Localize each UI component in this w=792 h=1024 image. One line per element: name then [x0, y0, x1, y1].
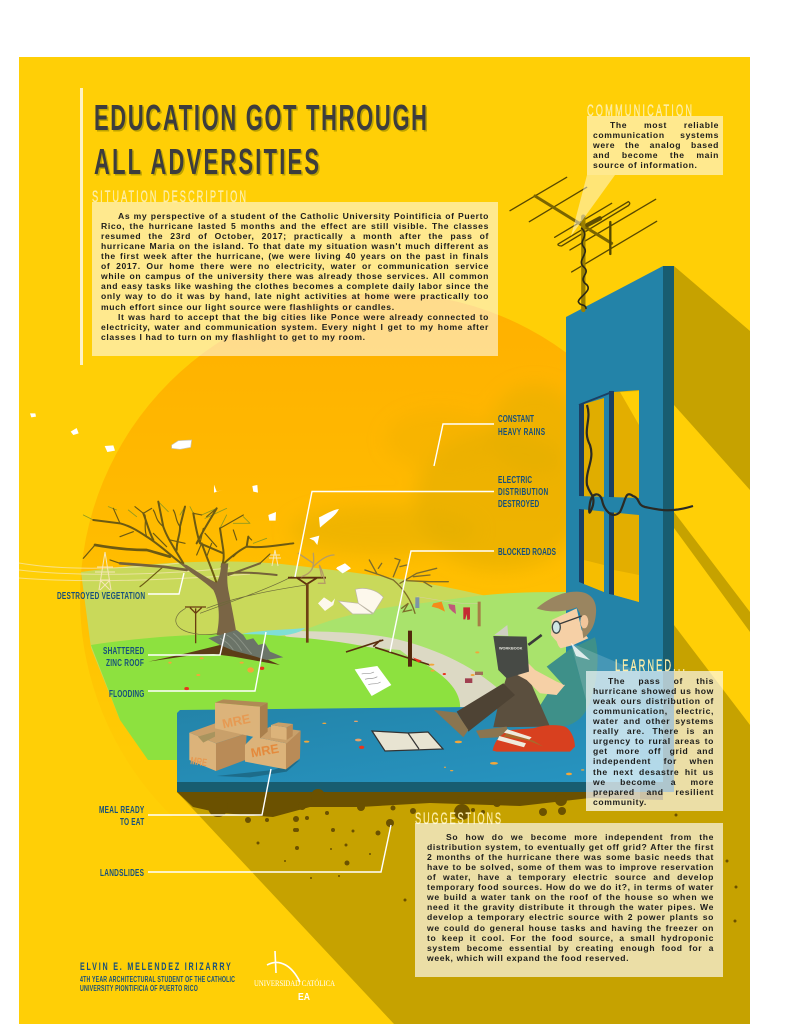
platform top	[177, 705, 663, 782]
suggestions text: need it the gravity distribute it through the water pipes. We	[427, 902, 714, 912]
label: landslides: LANDSLIDES	[100, 866, 144, 878]
tree trunk	[179, 563, 237, 635]
communication text: communication systems	[593, 130, 719, 140]
author credit: 4TH YEAR ARCHITECTURAL STUDENT OF THE CATHOLIC	[80, 976, 235, 984]
label: electric distribution destroyed: DISTRIBUTION	[498, 485, 548, 497]
suggestions text: system become essential by creating enough food for a	[427, 943, 714, 953]
beam: learned callout	[571, 643, 640, 811]
face	[551, 608, 588, 648]
situation text: hurricane Maria on the island. To that date my situation wasn't much different as	[101, 241, 489, 251]
icon: power towers and wires	[19, 550, 281, 590]
label: constant heavy rains	[498, 412, 545, 437]
label: constant heavy rains: HEAVY RAINS	[498, 425, 545, 437]
situation text	[101, 211, 489, 342]
suggestions text: develop a temporary electric source with 2 power plants so	[427, 912, 714, 922]
suggestions text	[427, 832, 714, 963]
suggestions text: week, which will expand the food reserved.	[427, 953, 629, 963]
large utility pole	[288, 578, 326, 584]
learned text: hurricane showed us how	[593, 686, 714, 696]
pencil	[528, 635, 542, 645]
handwritten sheet	[355, 666, 391, 696]
suggestions text: temporary food sources. How do we do it?, in terms of water	[427, 882, 714, 892]
author credit: UNIVERSITY PIONTIFICIA OF PUERTO RICO	[80, 985, 198, 993]
left box	[189, 723, 247, 771]
logo: universidad catolica	[254, 951, 335, 1003]
right box: MRE	[250, 742, 280, 760]
zinc roof	[208, 630, 283, 660]
road	[280, 631, 520, 712]
panel: situation description	[92, 202, 498, 356]
sleeve	[547, 649, 580, 685]
section heading: learned: LEARNED...	[615, 656, 685, 675]
suggestions text: we could do general house tasks and having the freezer on	[427, 923, 714, 933]
suggestions text: distribution system, to eventually get off grid? After the first	[427, 842, 714, 852]
title	[94, 98, 428, 184]
situation text: It was hard to accept that the big cities like Ponce were already connected to	[118, 312, 489, 322]
pale tree	[298, 553, 334, 583]
learned text: the next desastre hit us	[593, 767, 714, 777]
platform front edge	[177, 782, 663, 792]
antenna (zoom coordinates)	[510, 177, 657, 310]
arm	[517, 663, 565, 695]
illustration: main dead tree (zoom coordinates)	[83, 502, 326, 690]
section heading: suggestions: SUGGESTIONS	[415, 809, 501, 828]
small box	[271, 722, 293, 740]
situation text: Rico, the hurricane lasted 5 months and the effect are still visible. The classes	[101, 221, 489, 231]
storm clouds	[290, 385, 585, 570]
label: shattered zinc roof: SHATTERED	[103, 644, 144, 656]
label: meal ready to eat: MEAL READY	[99, 803, 144, 815]
beam: communication callout	[571, 175, 615, 236]
situation text: much effort since our light source were flashlights or candles.	[101, 302, 395, 312]
road debris	[413, 651, 483, 683]
label: meal ready to eat: TO EAT	[120, 815, 145, 827]
backpack	[493, 725, 575, 752]
tree roots	[148, 633, 280, 665]
shoes	[434, 710, 468, 737]
communication text: The most reliable	[610, 120, 719, 130]
title shadow: EDUCATION GOT THROUGH	[96, 100, 429, 140]
flying papers	[30, 413, 351, 573]
learned text: really are. There is an	[593, 726, 714, 736]
illustration: background trees, pole and clothesline (zoom coordinates)	[298, 553, 483, 696]
cable through window	[587, 405, 693, 515]
suggestions text: of water, have a temporary electric source and develop	[427, 872, 714, 882]
left box: MRE	[190, 755, 208, 769]
withered tree	[365, 558, 448, 613]
communication text	[593, 120, 719, 170]
sun disc	[80, 293, 566, 696]
right box	[245, 727, 301, 769]
label: meal ready to eat	[99, 803, 145, 827]
label: electric distribution destroyed	[498, 473, 548, 509]
author credit: ELVIN E. MELENDEZ IRIZARRY	[80, 961, 231, 972]
workbook	[494, 625, 508, 636]
label: electric distribution destroyed: DESTROYED	[498, 497, 539, 509]
learned text: community.	[593, 797, 647, 807]
title shadow	[96, 100, 428, 184]
suggestions text: have to be solved, some of them was to improve reservation	[427, 862, 714, 872]
wall: dark side	[663, 266, 674, 792]
small utility pole	[185, 607, 206, 643]
title shadow: ALL ADVERSITIES	[96, 144, 321, 184]
MRE boxes (zoom coordinates)	[189, 699, 364, 777]
learned text	[593, 676, 714, 807]
logo: universidad catolica: EA	[298, 992, 310, 1003]
situation text: only way to do it was by hand, late night activities at home were practically too	[101, 291, 489, 301]
logo: universidad catolica: UNIVERSIDAD CATÓLICA	[254, 978, 335, 988]
wall: blue front	[566, 266, 663, 790]
label: shattered zinc roof: ZINC ROOF	[106, 656, 144, 668]
learned text: get more off grid and	[593, 746, 714, 756]
situation text: electricity, water and communication system. Every night I get to my home after	[101, 322, 489, 332]
panel: communication	[587, 116, 723, 175]
title text: EDUCATION GOT THROUGH	[94, 98, 427, 138]
panel: suggestions	[415, 823, 723, 977]
soil specks	[208, 789, 738, 922]
long cast shadow of wall and platform	[177, 266, 750, 1024]
leaves on platform	[444, 741, 584, 775]
learned text: water and other systems	[593, 716, 714, 726]
hair	[537, 592, 596, 638]
callout labels	[57, 412, 556, 878]
situation text: the first week after the hurricane, (we were living 40 years on the past in finals	[101, 251, 489, 261]
situation text: of 2017. Our home there were no electricity, water or communication service	[101, 261, 489, 271]
suggestions text: So how do we become more independent from the	[446, 832, 714, 842]
torn pages	[318, 597, 335, 611]
top box: MRE	[221, 712, 252, 731]
ear	[580, 615, 588, 628]
label: destroyed vegetation: DESTROYED VEGETATION	[57, 589, 145, 601]
suggestions text: we build a water tank on the roof of the house so when we	[427, 892, 714, 902]
legs	[493, 673, 550, 727]
section heading: communication: COMMUNICATION	[587, 101, 692, 120]
broken electric pole	[346, 640, 430, 665]
situation text: resumed the 23rd of October, 2017; practically a month after the pass of	[101, 231, 489, 241]
label: constant heavy rains: CONSTANT	[498, 412, 534, 424]
soil under platform	[177, 792, 663, 817]
learned text: we become a more	[593, 777, 714, 787]
learned text: communication, electric,	[593, 706, 714, 716]
shirt	[538, 637, 598, 727]
open book flying	[338, 588, 383, 614]
panel: learned	[586, 671, 723, 811]
suggestions text: to keep it cool. For the food source, a small hydroponic	[427, 933, 714, 943]
learned text: The pass of this	[608, 676, 714, 686]
window	[579, 390, 639, 602]
boy reading on the platform (zoom coordinates)	[434, 592, 598, 775]
communication text: were the analog based	[593, 140, 719, 150]
hanging cables	[176, 577, 307, 635]
learned text: weak ours distribution of	[593, 696, 714, 706]
callout leader lines	[148, 424, 494, 872]
learned text: urgency to rural areas to	[593, 736, 714, 746]
water	[238, 628, 305, 636]
label: electric distribution destroyed: ELECTRIC	[498, 473, 533, 485]
boy reading on the platform (zoom coordinates): WORKBOOK	[499, 646, 522, 651]
top box	[215, 699, 268, 738]
title text	[94, 98, 427, 182]
communication text: and become the main	[593, 150, 719, 160]
communication text: source of information.	[593, 160, 698, 170]
far hill	[81, 561, 580, 720]
front lawn	[91, 634, 460, 760]
section heading: situation description: SITUATION DESCRIPTION	[92, 187, 246, 206]
learned text: independent for when	[593, 756, 714, 766]
leaves on the lawn	[168, 657, 254, 676]
label: shattered zinc roof	[103, 644, 144, 668]
vertical accent bar	[80, 88, 83, 365]
suggestions text: 2 months of the hurricane there was some basic needs that	[427, 852, 714, 862]
label: blocked roads: BLOCKED ROADS	[498, 545, 556, 557]
near hill	[300, 592, 580, 720]
glasses	[552, 616, 582, 633]
situation text: classes I had to turn on my flashlight to get to my room.	[101, 332, 366, 342]
situation text: As my perspective of a student of the Catholic University Pointificia of Puerto	[118, 211, 489, 221]
clothesline	[415, 597, 481, 626]
title text: ALL ADVERSITIES	[94, 142, 319, 182]
learned text: prepared and resilient	[593, 787, 714, 797]
open book on platform	[372, 731, 443, 751]
situation text: and easy tasks like washing the clothes becomes a complete daily labor since the	[101, 281, 489, 291]
author credit	[80, 961, 235, 993]
label: flooding: FLOODING	[109, 687, 144, 699]
situation text: while on campus of the university there was already those services. All common	[101, 271, 489, 281]
